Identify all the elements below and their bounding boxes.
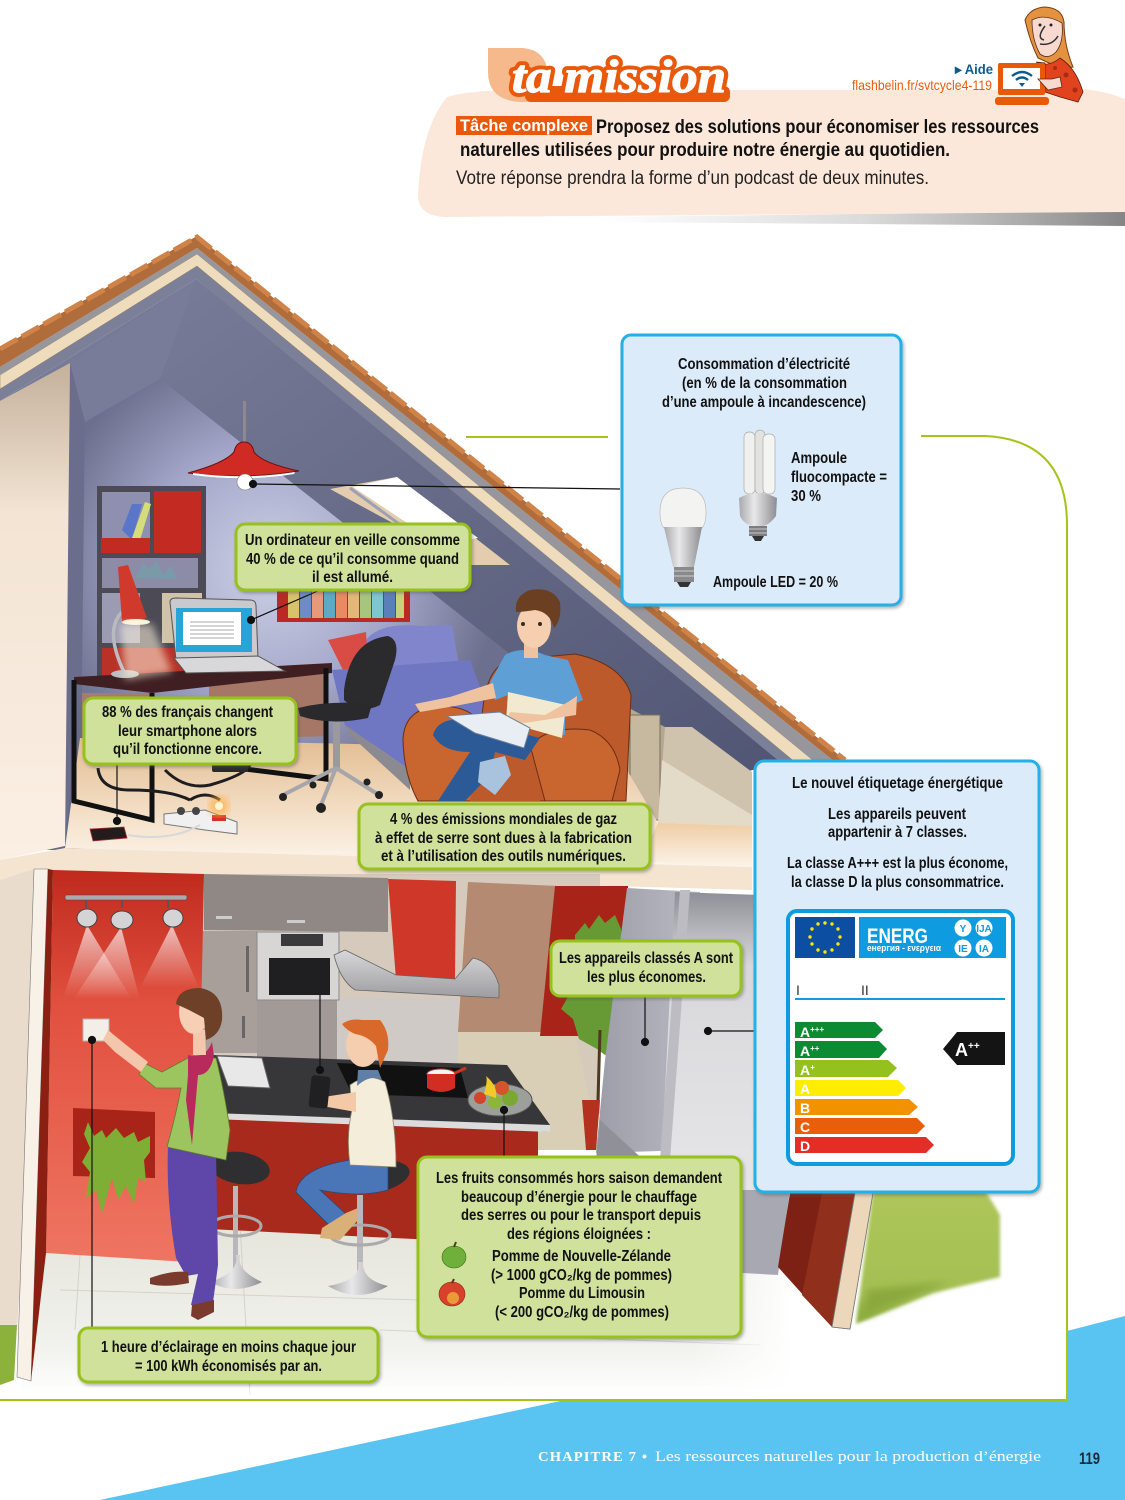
help link: flashbelin.fr/svtcycle4-119: [852, 77, 992, 93]
woman at the switch: [103, 988, 230, 1320]
tall cabinets: [201, 931, 257, 1053]
splashback: [337, 998, 458, 1063]
task tag: Tâche complexe: [460, 116, 588, 135]
red strip wall: [540, 886, 628, 1036]
office chair: [279, 636, 396, 813]
hanging plant: [82, 1122, 150, 1214]
grey wall right: [742, 1190, 790, 1275]
upper cabinets: [204, 874, 388, 932]
icon: red apple: [439, 1279, 465, 1306]
floor pale overlay at bottom: [20, 1388, 800, 1398]
plant by fridge: [561, 915, 623, 1150]
footer blue band: [100, 1316, 1125, 1500]
rating scale: A: [800, 1081, 810, 1097]
rating scale: D: [800, 1138, 810, 1154]
tiles: [0, 236, 845, 762]
ENERG header: Y: [960, 924, 967, 935]
grass right: [832, 1190, 1000, 1329]
panel: energy labelling: Les appareils peuvent: [828, 806, 967, 823]
saucepan: [427, 1068, 466, 1092]
footer text: •: [642, 1448, 647, 1464]
mission title: ta mission: [512, 51, 726, 103]
right red wall: [778, 1193, 873, 1329]
light switch: [83, 1019, 109, 1041]
rating scale: +: [810, 1063, 815, 1072]
callout: out-of-season fruit: beaucoup d’énergie pour le chauffage: [461, 1189, 697, 1206]
task text: naturelles utilisées pour produire notre énergie au quotidien.: [460, 140, 950, 161]
right brown cabinet: [458, 882, 558, 1032]
panel: energy labelling: la classe D la plus consommatrice.: [791, 874, 1004, 891]
page number: 119: [1079, 1449, 1100, 1468]
icon: green apple: [442, 1242, 466, 1268]
power strip and cables: [98, 763, 250, 837]
dark wall side: [31, 869, 53, 1381]
footer text: Les ressources naturelles pour la production d’énergie: [655, 1449, 1041, 1465]
wall niche: [73, 1108, 155, 1178]
ground floor: kitchen: [0, 869, 1000, 1400]
panel: bulb consumption: Ampoule LED = 20 %: [713, 574, 838, 591]
stool 2: [328, 1155, 412, 1295]
rating scale: B: [800, 1100, 810, 1116]
callout: lighting: 1 heure d’éclairage en moins chaque jour: [101, 1339, 356, 1356]
panel: energy labelling: [755, 761, 1039, 1192]
cooker hood: [334, 950, 499, 998]
sloped ceiling: [0, 279, 790, 850]
kitchen rear floor: [458, 1032, 600, 1150]
ENERG header: ENERG: [867, 925, 928, 948]
callout: smartphones: qu’il fonctionne encore.: [113, 741, 262, 758]
man on stool: [296, 1020, 396, 1240]
left ceiling facet: [70, 279, 196, 422]
grey fascia: [0, 248, 835, 762]
panel: bulb consumption: [622, 335, 901, 605]
bedroom floor: [65, 738, 752, 867]
grass left: [0, 1325, 17, 1385]
rating scale: +++: [810, 1025, 824, 1034]
spotlight cones: [63, 925, 199, 1000]
panel: bulb consumption: Ampoule: [791, 450, 847, 467]
lower units: [257, 1000, 337, 1060]
leader lines: [88, 480, 754, 1327]
floor slab: [0, 848, 752, 890]
callout: smartphones: 88 % des français changent: [102, 704, 274, 721]
callout: out-of-season fruit: (> 1000 gCO₂/kg de pommes): [491, 1267, 672, 1284]
ENERG header: IA: [979, 944, 989, 955]
worktop and base: [187, 1055, 550, 1245]
callout: computer standby: 40 % de ce qu’il consomme quand: [246, 551, 459, 568]
ceiling lamp: [188, 401, 299, 490]
panel: energy labelling: appartenir à 7 classes.: [828, 824, 967, 841]
icon: LED bulb: [660, 488, 706, 587]
left wall side: [65, 363, 85, 846]
task text: Votre réponse prendra la forme d’un podcast de deux minutes.: [456, 168, 929, 189]
skylight: [330, 477, 510, 565]
mission title: ta mission: [512, 51, 726, 103]
callout: out-of-season fruit: Pomme du Limousin: [519, 1285, 645, 1302]
mission tab: [488, 48, 548, 102]
task text: Proposez des solutions pour économiser les ressources: [596, 117, 1039, 138]
panel: energy labelling: Le nouvel étiquetage énergétique: [792, 775, 1003, 792]
callout: class A appliances: les plus économes.: [587, 969, 706, 986]
callout: lighting: = 100 kWh économisés par an.: [135, 1358, 322, 1375]
callout: smartphones: [84, 698, 296, 764]
red wall: [46, 870, 204, 1262]
callout: out-of-season fruit: [418, 1157, 741, 1337]
EU flag: [795, 917, 855, 958]
callout: out-of-season fruit: des régions éloignées :: [507, 1226, 651, 1243]
floor fade: [690, 1260, 795, 1400]
fridge: [596, 888, 760, 1190]
rating arrow: ++: [968, 1041, 980, 1052]
energy label: [788, 911, 1013, 1164]
spotlight rail: [65, 895, 187, 929]
footer text: [538, 1448, 1041, 1465]
model line: II: [861, 982, 869, 998]
rating scale: A: [800, 1062, 810, 1078]
armchair: [403, 654, 631, 801]
smartphone: [90, 827, 127, 841]
panel: bulb consumption: 30 %: [791, 488, 821, 505]
frame: green outline: [0, 436, 1067, 1400]
rating scale: A: [800, 1043, 810, 1059]
kitchen back wall: [200, 874, 600, 1114]
boy reading: [415, 589, 583, 801]
rating scale: C: [800, 1119, 810, 1135]
beige fascia: [0, 254, 815, 762]
ENERG header: IE: [958, 944, 968, 955]
stool 1: [208, 1148, 272, 1289]
left edge strip: [17, 869, 48, 1381]
ENERG header: [859, 917, 1006, 958]
callout: digital emissions: à effet de serre sont dues à la fabrication: [375, 830, 632, 847]
banner background: [418, 89, 1125, 217]
panel: bulb consumption: d’une ampoule à incandescence): [662, 394, 866, 411]
fruit bowl: [468, 1076, 532, 1116]
help link: [852, 61, 993, 93]
floor edge: [640, 823, 752, 867]
callout: computer standby: Un ordinateur en veille consomme: [245, 532, 460, 549]
red chimney: [388, 879, 456, 979]
panel: bulb consumption: fluocompacte =: [791, 469, 887, 486]
illustration: cutaway house: [0, 236, 1000, 1400]
icon: compact fluorescent bulb: [739, 430, 777, 541]
callout: computer standby: [236, 524, 470, 590]
model line: [795, 982, 1005, 1000]
panel: bulb consumption: (en % de la consommation: [682, 375, 847, 392]
back wall: [81, 379, 590, 770]
callout: digital emissions: et à l’utilisation des outils numériques.: [381, 848, 626, 865]
left cream wall: [0, 363, 70, 860]
oven: [257, 932, 339, 1000]
inner trim: [0, 266, 795, 762]
rating scale: [795, 1022, 934, 1154]
callout: out-of-season fruit: Les fruits consommés hors saison demandent: [436, 1170, 723, 1187]
laptop: [170, 598, 285, 673]
wall book shelf: [277, 590, 410, 622]
panel: bulb consumption: Consommation d’électricité: [678, 356, 850, 373]
desk: [74, 663, 332, 820]
task text: [456, 117, 1039, 189]
footer text: CHAPITRE 7: [538, 1450, 637, 1465]
rating arrow: [943, 1032, 1005, 1065]
callout: digital emissions: 4 % des émissions mondiales de gaz: [390, 811, 617, 828]
exterior wall: [0, 870, 48, 1330]
panel: energy labelling: La classe A+++ est la plus économe,: [787, 855, 1008, 872]
rating arrow: A: [955, 1040, 968, 1060]
callout: smartphones: leur smartphone alors: [118, 723, 257, 740]
ENERG header: енергия - ενεργεια: [867, 943, 941, 953]
ENERG header: IJA: [976, 924, 992, 935]
callout: lighting: [79, 1328, 378, 1382]
callout: out-of-season fruit: Pomme de Nouvelle-Zélande: [492, 1248, 671, 1265]
callout: computer standby: il est allumé.: [312, 569, 393, 586]
kitchen floor: [20, 1215, 790, 1395]
bookshelf: [97, 486, 206, 676]
model line: I: [796, 982, 800, 998]
knee wall and cupboard: [590, 680, 752, 826]
callout: class A appliances: Les appareils classés A sont: [559, 950, 734, 967]
banner shadow: [600, 211, 1125, 226]
icon: woman with laptop: [995, 7, 1083, 105]
desk lamp: [111, 565, 172, 680]
roof: [0, 236, 845, 762]
help link: ▸ Aide: [954, 61, 993, 77]
rating scale: ++: [810, 1044, 820, 1053]
callout: out-of-season fruit: des serres ou pour le transport depuis: [461, 1207, 701, 1224]
callout: class A appliances: [551, 941, 741, 996]
upper floor: bedroom: [0, 279, 790, 890]
mission banner: [418, 7, 1125, 226]
bed: [328, 625, 485, 790]
rating scale: A: [800, 1024, 810, 1040]
callout: digital emissions: [359, 804, 650, 869]
callout: out-of-season fruit: (< 200 gCO₂/kg de pommes): [495, 1304, 669, 1321]
